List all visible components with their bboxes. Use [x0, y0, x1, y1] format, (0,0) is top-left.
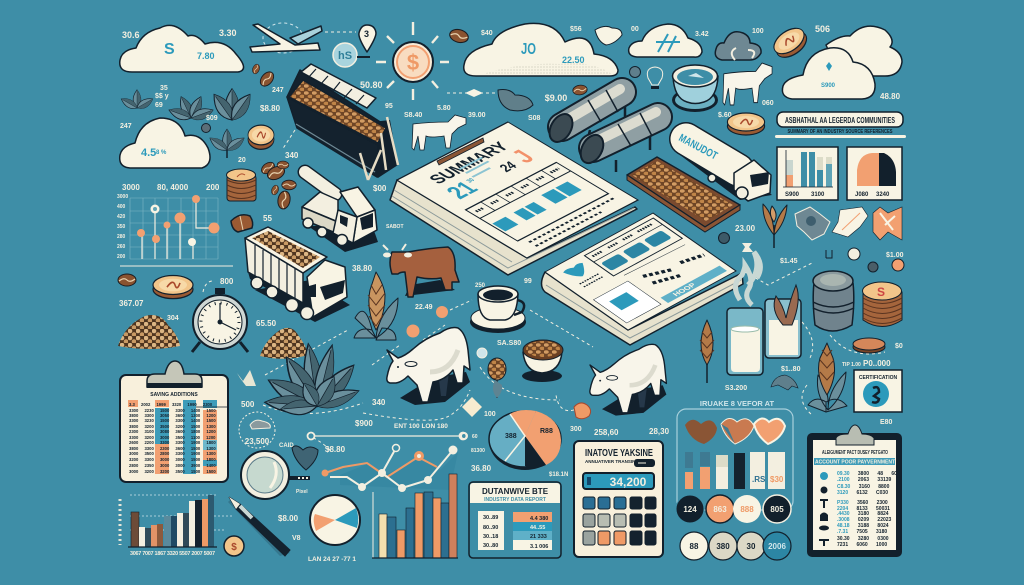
- clipboard table: left: 3800 3300 3050 3600 1300 1200: [129, 413, 216, 418]
- small icons and labels: left centre: 55: [263, 214, 272, 223]
- cloud: top centre: [464, 23, 618, 76]
- clipboard table: left: 3000 3500 2800 3300 1900 1300: [129, 451, 216, 456]
- price labels: top centre: 50.80: [360, 80, 383, 90]
- tanker truck: MANUDOT: [677, 132, 719, 162]
- diamond and labels: pie area: 100: [484, 411, 496, 418]
- labels and axis line: centre bottom: 340: [372, 398, 386, 407]
- price labels: top centre: 00: [631, 26, 639, 33]
- summary report book: SUMMARY: [425, 139, 514, 187]
- calculator: INATOVE YAKSINE: [585, 448, 653, 459]
- diamond and labels: pie area: 258,60: [594, 428, 619, 437]
- labels: right middle: [826, 248, 904, 272]
- bar chart: bottom left: [120, 495, 232, 557]
- pie chart: 388: [505, 433, 517, 440]
- emblem card: E80: [880, 419, 893, 426]
- stat circles: row two: 380: [716, 542, 730, 551]
- pipes: [545, 89, 658, 172]
- second report book: [542, 213, 743, 345]
- price labels: top left: 35: [160, 85, 168, 92]
- flat coin: P0..000: [863, 359, 891, 368]
- labels: centre: 99: [524, 278, 532, 285]
- summary report book: J: [505, 146, 542, 167]
- diamond and labels: pie area: $18.1N: [549, 472, 568, 478]
- price labels: top centre: S8.40: [404, 112, 422, 119]
- dot line chart: left: 3000: [122, 183, 140, 192]
- diamond and labels: pie area: 36.80: [471, 464, 492, 473]
- coffee beans cluster: [259, 160, 296, 210]
- wheat sprig and maps: [763, 204, 902, 248]
- clipboard table: left: 3300 2230 1500 3300 1400 1500: [129, 408, 216, 413]
- stat circles: row one: 888: [740, 505, 754, 514]
- gray animal silhouette and label: $1..80: [781, 366, 801, 373]
- clipboard table: left: 2600 2200 3300 3300 1900 1800: [129, 440, 216, 445]
- clipboard table: right: .7.31 7505 3180: [837, 529, 887, 535]
- flat coin: $0: [895, 343, 903, 350]
- table panel: dutanwive: 21 333: [530, 534, 547, 540]
- goat: [723, 63, 772, 105]
- cloud: small top right: [629, 24, 702, 57]
- bean and coin: lower left: 367.07: [119, 299, 144, 308]
- coffee cup: [470, 286, 526, 333]
- dot line chart: left: 280: [117, 234, 126, 240]
- labels: right middle: $1.00: [886, 252, 904, 259]
- price labels: top left: 30.6: [122, 30, 140, 40]
- stat circles: row two: 30: [747, 542, 756, 551]
- cloud: left: 8 %: [156, 150, 167, 156]
- pin marker: [325, 25, 376, 52]
- title banner: communities: SUMMARY OF AN INDUSTRY SOURCE REFERENCES: [788, 129, 893, 135]
- area chart panel: 3240: [876, 192, 890, 198]
- dot line chart: left: 350: [117, 224, 126, 230]
- cloud: top centre: JO: [521, 41, 536, 58]
- wheat sprig: milk left: [700, 320, 747, 392]
- clipboard table: left: 2800 2350 3000 3000 3900 1400: [129, 463, 216, 468]
- dot line chart: left: 420: [117, 214, 126, 220]
- clipboard table: right: P330 3560 2300: [837, 500, 888, 506]
- bean and coin: lower left: 800: [220, 277, 234, 286]
- price labels: top centre: 5.80: [437, 105, 451, 112]
- table panel: dutanwive: 30..80: [483, 543, 498, 549]
- map badge with price: 500: [241, 400, 255, 409]
- clipboard table: left: 3.3 2002 1999 3320 1990 2300: [129, 402, 213, 407]
- gray animal silhouette and label: [771, 366, 801, 390]
- table panel: dutanwive: 3.1 006: [530, 544, 548, 550]
- stat circles: row one: 124: [683, 505, 697, 514]
- pie chart in circle: $8.00: [278, 514, 299, 523]
- clipboard table: left: [120, 361, 228, 482]
- cloud: left: [120, 118, 210, 168]
- hearts and bars panel: $30: [770, 475, 784, 484]
- stat circles: row two: 2006: [768, 542, 786, 551]
- flat coin: TIP 1.00: [842, 362, 861, 368]
- magnifying glass: Pixel: [296, 489, 308, 495]
- title banner: communities: ASBHATHAL AA LEGERDA COMMUNITIES: [785, 116, 895, 125]
- price labels: top centre: $9.00: [545, 93, 567, 103]
- labels: centre: $1.45: [780, 258, 798, 265]
- cloud: top centre: 22.50: [562, 55, 585, 65]
- small icons and labels: left centre: 247: [272, 87, 284, 94]
- small icons and labels: left centre: $09: [206, 115, 218, 122]
- labels and axis line: centre bottom: ENT 100 LON 180: [394, 423, 448, 430]
- clouds: top right: 48.80: [880, 92, 901, 101]
- small icons and labels: left centre: $8.80: [260, 104, 281, 113]
- pie chart: [489, 410, 561, 470]
- magnifying glass: [241, 451, 310, 499]
- area chart panel: [847, 147, 902, 200]
- labels and axis line: centre bottom: CAID: [279, 443, 294, 449]
- small icons and labels: left centre: $00: [373, 184, 387, 193]
- price labels: top left: 247: [120, 123, 132, 130]
- wheat sprig: milk left: S3.200: [725, 385, 747, 392]
- labels: centre: SA.S80: [497, 340, 521, 347]
- diamond and labels: pie area: 81300: [471, 448, 485, 454]
- dot line chart: left: [117, 183, 233, 266]
- labels: centre: [415, 258, 798, 347]
- small icons and labels: left centre: [202, 63, 404, 273]
- stat circles: row one: 863: [713, 505, 727, 514]
- clipboard table: right: ACCOUNT POOR PAYVERNMENT: [815, 460, 895, 466]
- milk glass with leaves: [765, 285, 801, 358]
- labels around tray: [718, 224, 756, 252]
- summary report book: [390, 122, 638, 275]
- bean pile: centre left: [260, 328, 308, 359]
- bar chart panel: S900: [785, 192, 800, 198]
- price labels: top centre: $40: [481, 30, 493, 37]
- cloud: left: 4.5: [141, 147, 156, 159]
- cloud: top left: [120, 25, 244, 72]
- clouds: top right: [782, 26, 902, 101]
- cloud: top left: S: [164, 41, 175, 58]
- clipboard table: right: [807, 425, 902, 557]
- clipboard table: left: SAVING ADDITIONS: [150, 392, 198, 398]
- calculator: [574, 441, 663, 557]
- price labels: top centre: 506: [815, 24, 830, 34]
- clipboard table: right: .4430 3180 8824: [837, 511, 889, 517]
- clipboard table: left: 3200 3300 3000 3000 1500 1800: [129, 457, 216, 462]
- clipboard table: left: 3800 3300 2300 3600 1500 1300: [129, 446, 216, 451]
- table panel: dutanwive: DUTANWIVE BTE: [482, 487, 549, 496]
- clipboard table: right: 30.30 3280 0300: [837, 536, 889, 542]
- map badge with price: [239, 400, 275, 448]
- bar chart panel: [777, 147, 838, 200]
- clipboard table: right: 7231 6060 1000: [837, 542, 887, 548]
- stat circles: row one: 805: [770, 505, 784, 514]
- dump truck: [245, 227, 350, 322]
- clipboard table: right: .2100 2063 33139: [837, 477, 892, 483]
- stopwatch: [192, 288, 248, 352]
- magnifier dollar icon: [333, 43, 370, 67]
- coin stack large: S: [877, 285, 885, 299]
- clipboard table: right: 3120 6132 C030: [837, 490, 888, 496]
- price labels: top centre: $56: [570, 26, 582, 33]
- price labels: top centre: 100: [752, 28, 764, 35]
- clipboard table: right: 09.30 3800 48 60: [837, 471, 897, 477]
- labels and axis line: centre bottom: [279, 398, 466, 470]
- hearts and bars panel: .RS: [752, 475, 766, 484]
- stat circles: row two: 88: [690, 542, 699, 551]
- price labels: top centre: 060: [762, 100, 774, 107]
- white cow: top: [412, 115, 466, 150]
- price labels: top left: 3.30: [219, 28, 237, 38]
- labels: centre: 22.49: [415, 304, 433, 311]
- small icons and labels: left centre: 340: [285, 151, 299, 160]
- cement truck: [302, 172, 378, 252]
- cloud: top left: 7.80: [197, 51, 215, 61]
- price labels: top centre: 3.42: [695, 31, 709, 38]
- teacup with water: [672, 65, 718, 112]
- summary report book: 21: [440, 177, 484, 203]
- gray cloud icon: [715, 32, 761, 60]
- table panel: dutanwive: 30..89: [483, 515, 498, 521]
- price labels: top left: $$ y: [155, 93, 169, 100]
- connector dashed lines: [263, 93, 885, 450]
- half coffee bean: [231, 215, 253, 232]
- table panel: dutanwive: INDUSTRY DATA REPORT: [484, 497, 546, 503]
- bean and coin: lower left: 304: [167, 315, 179, 322]
- pie chart in circle: [278, 495, 360, 563]
- emblem card: CERTIFICATION: [859, 375, 898, 381]
- price labels: top centre: 95: [385, 103, 393, 110]
- labels around tray: 23.00: [735, 224, 756, 233]
- price labels: top centre: $.60: [718, 112, 732, 119]
- clipboard table: left: 3300 3200 3000 3500 1100 1200: [129, 435, 216, 440]
- clipboard table: right: 48.18 3188 8024: [837, 523, 889, 529]
- bar chart: bottom left: 3067 7007 1867 3320 5507 2007 5007: [130, 551, 215, 557]
- diamond and labels: pie area: [461, 397, 670, 478]
- stat circles: row two: [680, 532, 791, 560]
- white cow: centre: [387, 328, 470, 405]
- diamond and labels: pie area: 28,30: [649, 427, 670, 436]
- orange dots: [406, 306, 448, 338]
- bar chart: bottom centre: [372, 474, 458, 558]
- map badge with price: 23,500: [245, 437, 270, 446]
- labels and axis line: centre bottom: $900: [355, 419, 373, 428]
- small flower plant: [477, 348, 506, 398]
- dot line chart: left: 3000: [117, 194, 128, 200]
- brown cow: [383, 244, 459, 297]
- pen: [228, 497, 290, 556]
- pie chart: R88: [540, 428, 553, 435]
- clipboard table: left: 3300 3230 1500 3300 1400 1500: [129, 418, 216, 423]
- big leaf bush: [264, 343, 361, 416]
- leaf plants: left column: [119, 89, 255, 158]
- coin stack small: [226, 169, 256, 201]
- small icons and labels: left centre: 20: [238, 157, 246, 164]
- small icons and labels: left centre: SABOT: [386, 224, 404, 230]
- clipboard table: right: ALEIGUMENT PACT DUSEY PETGATO: [822, 450, 888, 456]
- price labels: top centre: S08: [528, 115, 541, 122]
- dot line chart: left: 200: [206, 183, 220, 192]
- table panel: dutanwive: 30..18: [483, 534, 498, 540]
- sun coin icon: $: [407, 50, 419, 75]
- bar chart panel: 3100: [811, 192, 825, 198]
- labels and axis line: centre bottom: $8.80: [325, 445, 346, 454]
- coin stack large: [862, 282, 902, 326]
- hearts and bars panel: [677, 409, 793, 510]
- diamond and labels: pie area: 60: [472, 434, 478, 440]
- sun coin icon: [376, 22, 449, 100]
- dot line chart: left: 200: [117, 254, 126, 260]
- coffee bean: top: [448, 27, 470, 45]
- calculator: 34,200: [610, 475, 647, 489]
- summary report book: 24: [494, 159, 521, 174]
- bean hopper conveyor: [287, 64, 398, 180]
- labels: centre: 250: [475, 283, 486, 289]
- small icons: top centre: [465, 66, 663, 111]
- heading: hearts panel: IRUAKE 8 VEFOR AT: [700, 399, 774, 408]
- tanker truck: [677, 132, 772, 201]
- table panel: dutanwive: 44..55: [530, 525, 545, 531]
- orange blob icon: [574, 403, 591, 419]
- diamond and labels: pie area: 300: [570, 426, 582, 433]
- stat circles: row one: [676, 495, 791, 523]
- white cow: right: [590, 344, 666, 416]
- table panel: dutanwive: 80..90: [483, 525, 498, 531]
- bean pile: left: [118, 315, 180, 349]
- coin: small round: $: [231, 542, 237, 553]
- bean and coin: lower left: [118, 274, 277, 328]
- small icons and labels: left centre: 38.80: [352, 264, 373, 273]
- clipboard table: right: .3008 0209 22023: [837, 517, 892, 523]
- line chart: centre: [322, 444, 458, 492]
- price labels: top centre: 39.00: [468, 112, 486, 119]
- area chart panel: J080: [855, 192, 869, 198]
- magnifier dollar icon: hS: [338, 50, 352, 62]
- small arrow icon: [237, 370, 256, 386]
- coin: tilted: [769, 23, 811, 62]
- bean and coin: lower left: 65.50: [256, 319, 277, 328]
- pie chart in circle: LAN 24 27 -77 1: [308, 556, 356, 563]
- table panel: dutanwive: [469, 482, 561, 558]
- clipboard table: left: 3800 3200 3500 3200 1500 1300: [129, 424, 216, 429]
- bowl of beans: [522, 340, 563, 382]
- dot line chart: left: 260: [117, 244, 126, 250]
- price labels: top centre: [360, 24, 830, 122]
- clipboard table: left: 3000 3200 3200 3500 1500 1500: [129, 469, 216, 474]
- clouds: top right: S900: [821, 83, 836, 89]
- oil barrel: [813, 271, 854, 331]
- summary report book: 30: [466, 178, 477, 184]
- wheat plant: centre: [354, 272, 398, 340]
- bean tray: [627, 157, 740, 232]
- second report book: HOOP: [671, 282, 698, 298]
- price labels: top left: 69: [155, 102, 163, 109]
- dot line chart: left: 400: [117, 204, 126, 210]
- steam: [735, 252, 760, 305]
- clipboard table: right: 2204 8133 50031: [837, 506, 890, 512]
- coin: small round: [224, 536, 244, 556]
- emblem card: [854, 370, 902, 426]
- wheat plant: right: [808, 343, 847, 412]
- pie chart in circle: V8: [292, 535, 301, 542]
- milk glass: left: [727, 308, 763, 375]
- price labels: top left: [120, 28, 237, 130]
- pin marker: 3: [364, 29, 369, 39]
- clipboard table: right: C8.30 3160 8800: [837, 484, 890, 490]
- clipboard table: left: 2300 3100 3080 3600 1800 1200: [129, 429, 216, 434]
- table panel: dutanwive: 4.4 380: [530, 516, 548, 522]
- coin: by tanker: [727, 113, 765, 135]
- cloud blob: small: [595, 26, 622, 45]
- plane icon: [250, 23, 322, 53]
- title banner: communities: [775, 112, 906, 138]
- flat coin: [842, 338, 903, 368]
- calculator: ANNUATIVER TRANSINE:: [585, 459, 640, 464]
- dot line chart: left: 80, 4000: [157, 183, 189, 192]
